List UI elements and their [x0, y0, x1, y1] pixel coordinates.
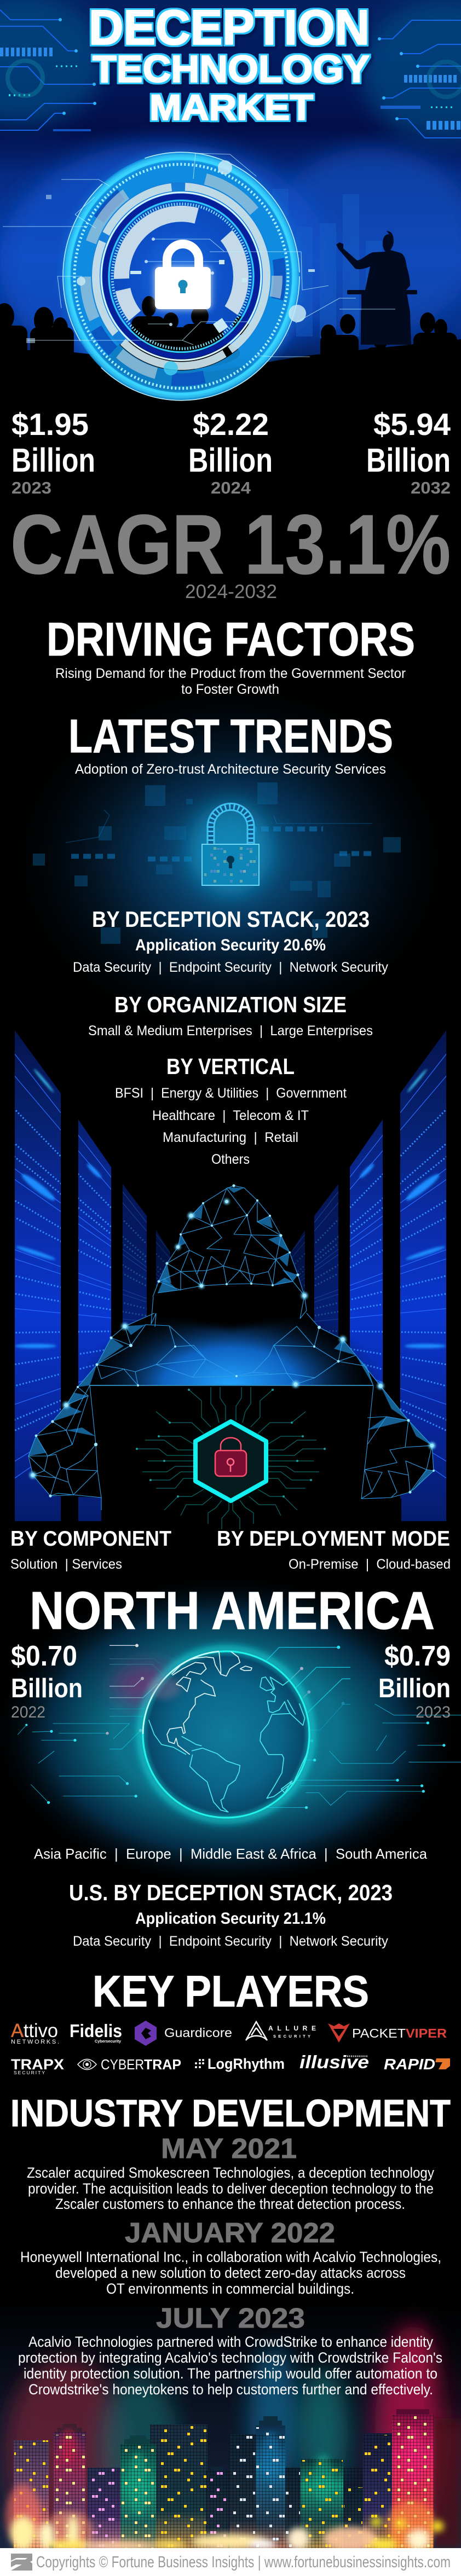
stat: 2032 value: 2032	[411, 478, 451, 497]
stat: 2024 value: $2.22	[193, 407, 269, 442]
by deployment mode: On-Premise | Cloud-based	[289, 1557, 451, 1572]
inner disc	[106, 198, 256, 355]
icon: hexagon lock	[195, 1422, 266, 1501]
latest trends: LATEST TRENDS	[68, 710, 393, 763]
by organization size: Small & Medium Enterprises | Large Enterprises	[88, 1023, 373, 1038]
logo: Allure: SECURITY	[273, 2034, 310, 2039]
stat: 2022 value: Billion	[11, 1674, 83, 1703]
stat: 2023 value	[11, 407, 95, 497]
stat: 2023 value: $1.95	[11, 407, 89, 442]
logo: Allure	[246, 2022, 316, 2040]
by deployment mode	[217, 1527, 451, 1572]
stat: 2024 value: Billion	[188, 442, 273, 479]
outer circuit traces	[18, 1704, 461, 1751]
stat: 2023 value	[378, 1640, 451, 1721]
shoulder glow	[84, 1320, 378, 1385]
stat: 2023 value: Billion	[11, 442, 95, 479]
development: January 2022: JANUARY 2022	[125, 2217, 335, 2248]
logo: Allure: ALLURE	[268, 2024, 316, 2032]
by vertical: Healthcare | Telecom & IT	[152, 1108, 309, 1123]
by component	[10, 1527, 171, 1572]
footer bar	[0, 2548, 461, 2576]
street glow	[5, 2484, 443, 2551]
hood mesh	[151, 1186, 307, 1327]
latest trends: Adoption of Zero-trust Architecture Security Services	[75, 762, 386, 777]
title: DECEPTION	[89, 1, 370, 55]
stat: 2032 value	[366, 407, 451, 497]
continents	[149, 1651, 309, 1812]
ring connector lines	[3, 153, 395, 357]
city skyline background	[0, 2298, 461, 2551]
head void	[153, 1281, 304, 1328]
icon: Fortune Business Insights logo	[11, 2554, 32, 2571]
by component: BY COMPONENT	[10, 1527, 171, 1551]
logo: Fidelis: Fidelis	[70, 2021, 122, 2041]
logo: CyberTrap	[78, 2056, 181, 2073]
logo: CyberTrap: CYBER	[101, 2056, 144, 2073]
title: TECHNOLOGY	[93, 48, 370, 90]
CAGR figure: 2024-2032	[185, 581, 277, 602]
development: May 2021	[27, 2133, 434, 2212]
driving factors: to Foster Growth	[181, 682, 279, 697]
audience silhouette	[0, 296, 461, 417]
logo: PacketViper: PACKET	[352, 2026, 406, 2040]
driving factors	[47, 613, 415, 697]
hero illustration	[0, 0, 461, 417]
US by deception stack	[69, 1880, 393, 1949]
server racks left	[0, 1030, 231, 1521]
by deception stack: Application Security 20.6%	[135, 936, 326, 954]
logo: Attivo: Attivo	[11, 2020, 58, 2041]
by vertical: Others	[211, 1152, 250, 1167]
title	[89, 1, 370, 127]
by component: Solution | Services	[10, 1557, 122, 1572]
hero bottom fade	[0, 356, 461, 416]
development: July 2023: JULY 2023	[156, 2302, 305, 2334]
upper circuit traces	[110, 1644, 350, 1749]
stat: 2023 value: Billion	[378, 1674, 451, 1703]
logo: Attivo: A	[11, 2020, 24, 2041]
lit windows	[14, 2416, 433, 2548]
development: July 2023: Crowdstrike's honeytokens to help customers further and effectively.	[28, 2381, 433, 2398]
other regions: Asia Pacific | Europe | Middle East & Africa | South America	[34, 1846, 428, 1862]
logo: Attivo: NETWORKS.	[11, 2039, 59, 2045]
logo: Guardicore: Guardicore	[164, 2026, 232, 2040]
logo: illusive: illusive	[299, 2052, 369, 2072]
development: May 2021: Zscaler customers to enhance the threat detection process.	[55, 2196, 405, 2212]
logo: Rapid7: RAPID	[384, 2056, 435, 2073]
logo: Fidelis: Cybersecurity	[95, 2039, 122, 2044]
by deception stack	[73, 907, 388, 975]
security ring graphic	[63, 152, 299, 401]
development: January 2022: developed a new solution to detect zero-day attacks across	[55, 2265, 406, 2281]
US by deception stack: U.S. BY DECEPTION STACK, 2023	[69, 1880, 393, 1905]
mesh node glows	[30, 1199, 435, 1478]
development: January 2022	[20, 2217, 441, 2297]
stat: 2022 value: 2022	[11, 1703, 45, 1721]
by vertical: Manufacturing | Retail	[163, 1130, 298, 1145]
by deception stack: BY DECEPTION STACK, 2023	[92, 907, 370, 932]
logo: PacketViper	[328, 2023, 447, 2043]
stat: 2024 value	[188, 407, 273, 497]
stat: 2023 value: $0.79	[384, 1640, 451, 1672]
stat: 2022 value: $0.70	[11, 1640, 77, 1672]
presenter silhouette	[336, 231, 417, 345]
icon: circuit padlock	[189, 802, 272, 895]
by organization size: BY ORGANIZATION SIZE	[114, 992, 347, 1017]
building colour cores	[60, 2427, 423, 2517]
by deception stack: Data Security | Endpoint Security | Network Security	[73, 960, 388, 975]
by vertical: BFSI | Energy & Utilities | Government	[115, 1086, 347, 1101]
US by deception stack: Data Security | Endpoint Security | Network Security	[73, 1934, 388, 1949]
buildings	[14, 2409, 434, 2548]
globe lower traces	[31, 1751, 461, 1809]
development: May 2021: MAY 2021	[161, 2133, 297, 2164]
hexagon circuit traces	[136, 1387, 326, 1529]
development: January 2022: OT environments in commercial buildings.	[106, 2281, 354, 2297]
logo: TrapX: SECURITY	[14, 2070, 45, 2075]
mesh nodes	[31, 1184, 435, 1498]
server racks right	[231, 1030, 461, 1521]
window grid	[14, 2415, 434, 2548]
circular halo	[54, 143, 308, 410]
shoulder mesh	[28, 1313, 434, 1510]
hooded figure	[28, 1184, 435, 1521]
driving factors: Rising Demand for the Product from the Government Sector	[55, 666, 406, 681]
lock background panel	[1, 673, 460, 1045]
stat: 2022 value	[11, 1640, 83, 1721]
by vertical: BY VERTICAL	[166, 1054, 295, 1079]
background bar chart	[272, 189, 382, 338]
title: MARKET	[149, 87, 313, 127]
globe sphere	[141, 1649, 312, 1820]
stat: 2023 value: 2023	[416, 1703, 451, 1721]
key players heading: KEY PLAYERS	[93, 1967, 369, 2016]
logo: TrapX: TRAPX	[11, 2056, 64, 2073]
stat: 2024 value: 2024	[211, 478, 251, 497]
logo: PacketViper: VIPER	[406, 2026, 447, 2040]
US by deception stack: Application Security 21.1%	[135, 1910, 326, 1928]
logo: CyberTrap: TRAP	[144, 2056, 181, 2073]
development: July 2023	[18, 2302, 442, 2398]
circuit lines right	[378, 20, 461, 138]
stat: 2032 value: $5.94	[373, 407, 451, 442]
by organization size	[88, 992, 373, 1038]
logo: LogRhythm: LogRhythm	[208, 2056, 285, 2072]
circuit lines left	[0, 10, 96, 130]
by vertical	[115, 1054, 347, 1167]
stat: 2023 value: 2023	[11, 478, 51, 497]
latest trends	[68, 710, 393, 777]
ring nodes	[26, 160, 315, 375]
globe illustration	[11, 1587, 461, 1877]
icon: white padlock	[155, 244, 211, 309]
logo: Guardicore	[135, 2021, 232, 2046]
